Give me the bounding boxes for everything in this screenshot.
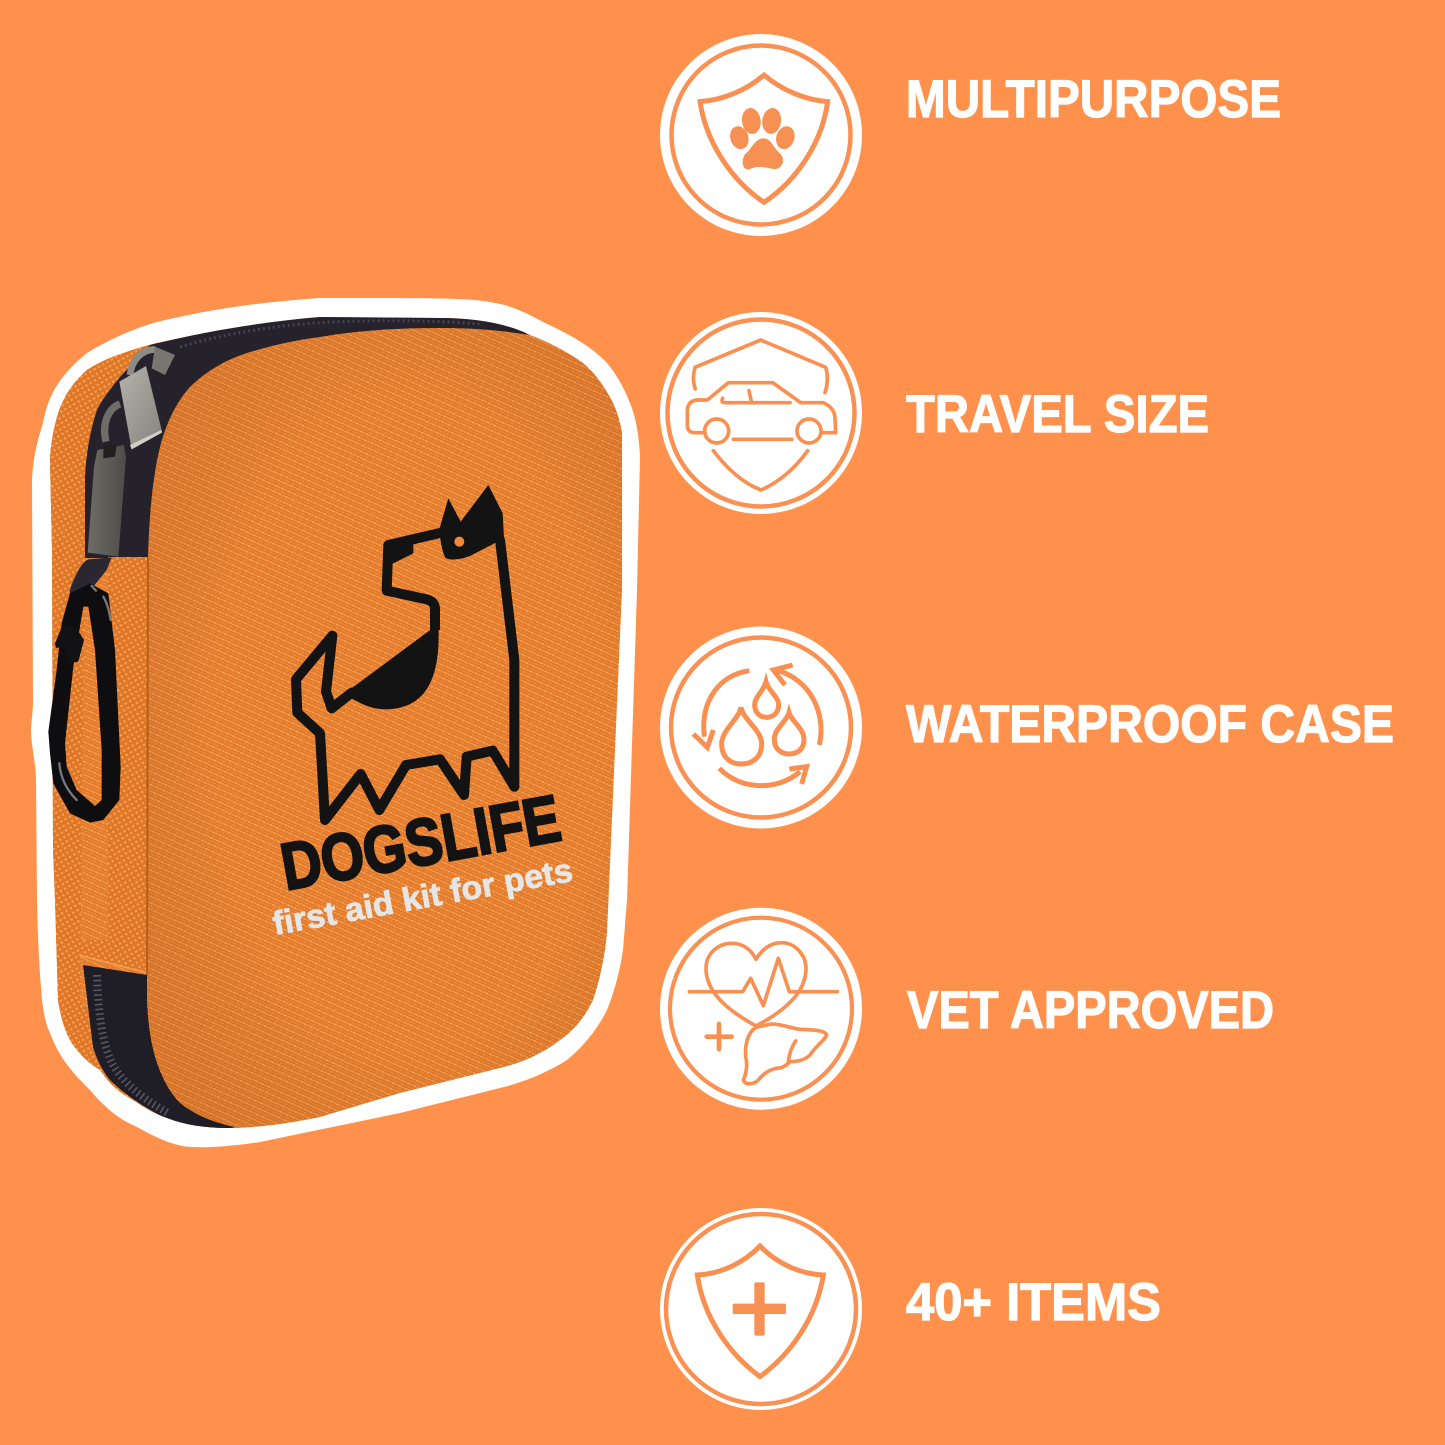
side panel fabric — [50, 342, 160, 1116]
dog head — [439, 485, 504, 559]
icon: heart and liver — [689, 943, 837, 1084]
feature: vet approved — [660, 908, 1274, 1110]
carabiner highlight — [59, 586, 111, 800]
icon: medical shield — [697, 1246, 823, 1377]
feature: waterproof case — [660, 626, 1394, 828]
zipper pull: upper — [119, 347, 175, 449]
carabiner clip — [48, 557, 121, 823]
icon: water drops cycle — [693, 665, 821, 786]
badge — [660, 312, 862, 514]
zipper teeth — [180, 321, 480, 347]
badge — [660, 626, 862, 828]
badge — [660, 1208, 862, 1410]
carabiner gate hinge — [55, 625, 84, 663]
label: TRAVEL SIZE — [906, 385, 1209, 444]
dog back — [500, 540, 514, 787]
case body — [40, 300, 640, 1140]
lower zipper band — [83, 965, 235, 1132]
dog logo — [296, 485, 514, 820]
carabiner frame — [48, 583, 121, 823]
upper zipper band — [85, 315, 530, 558]
feature: 40+ items — [660, 1208, 1161, 1410]
feature: travel size — [660, 312, 1209, 514]
label: VET APPROVED — [907, 981, 1274, 1040]
face shading — [140, 320, 630, 1130]
dog outline — [296, 636, 514, 820]
badge — [660, 34, 862, 236]
dog eye — [454, 537, 464, 547]
side strap — [78, 557, 148, 975]
dog belly — [348, 624, 439, 709]
dog nose — [384, 538, 413, 567]
strap seam — [79, 955, 147, 973]
white sticker outline — [31, 298, 640, 1147]
zipper pull: lower — [88, 404, 126, 557]
label: MULTIPURPOSE — [906, 70, 1281, 129]
label: WATERPROOF CASE — [906, 695, 1394, 754]
product photo: orange first aid case — [31, 298, 640, 1147]
feature: multipurpose — [660, 34, 1281, 236]
icon: paw shield — [700, 75, 828, 202]
badge — [660, 908, 862, 1110]
dog neck and muzzle — [387, 533, 442, 630]
logo tagline: first aid kit for pets — [270, 851, 575, 942]
label: 40+ ITEMS — [906, 1273, 1161, 1332]
icon: car shield — [687, 340, 836, 490]
logo wordmark: DOGSLIFE — [275, 781, 566, 904]
webbing loop — [69, 557, 112, 605]
lower zipper teeth — [97, 975, 168, 1113]
